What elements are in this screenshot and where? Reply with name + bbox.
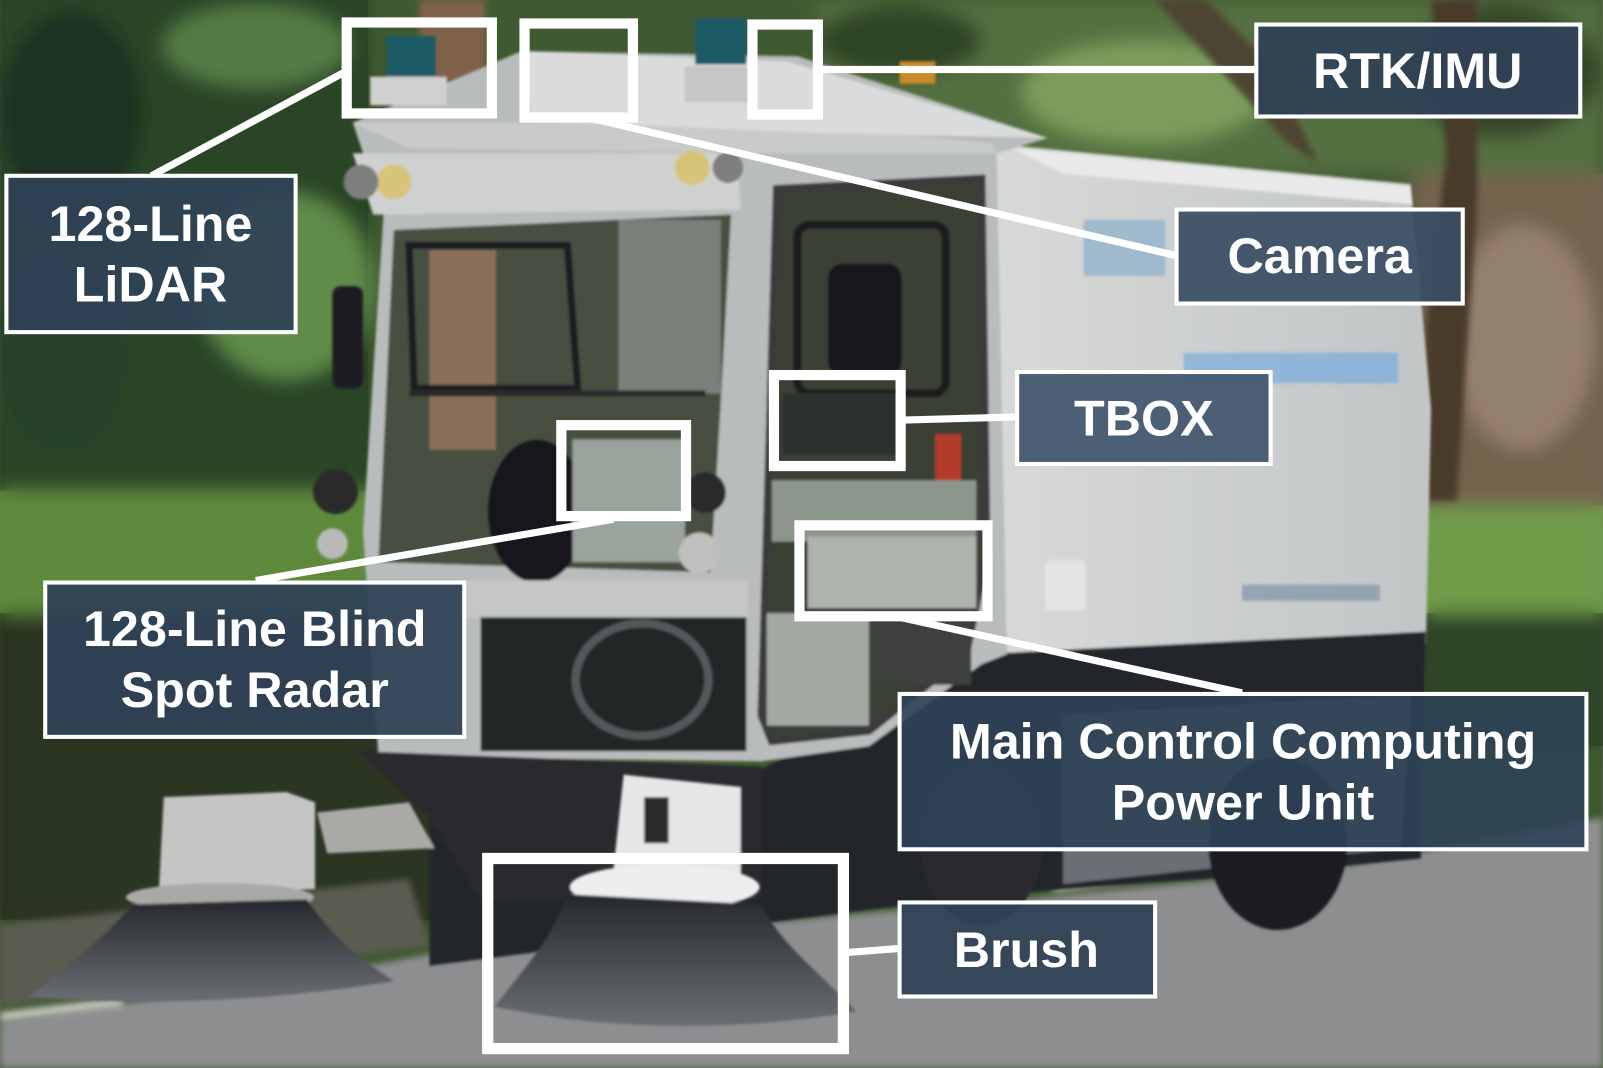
road	[0, 818, 1603, 1068]
box: computing unit	[799, 525, 988, 616]
label: RTK/IMU: RTK/IMU	[1313, 42, 1522, 99]
label: Brush: Brush	[954, 921, 1099, 978]
lower dark chassis	[389, 632, 1426, 966]
label: 128-Line Blind Spot Radar: Spot Radar	[121, 661, 389, 718]
side door window	[762, 179, 986, 741]
label: 128-Line LiDAR	[6, 176, 296, 332]
bumper	[358, 751, 762, 899]
rear box	[986, 143, 1431, 654]
label: TBOX	[1017, 372, 1271, 464]
sensor highlight boxes and leader lines	[152, 22, 1257, 1049]
front windscreen	[378, 215, 731, 572]
box: RTK/IMU	[752, 25, 818, 114]
label: Main Control Computing Power Unit: Power Unit	[1112, 774, 1375, 831]
label: 128-Line Blind Spot Radar	[45, 583, 464, 737]
box: lidar	[347, 22, 492, 113]
label: Main Control Computing Power Unit: Main Control Computing	[950, 712, 1536, 769]
leader lines	[152, 69, 1257, 953]
label: Brush	[900, 902, 1155, 996]
box: brush	[488, 858, 843, 1049]
label: Main Control Computing Power Unit	[900, 694, 1586, 849]
label: 128-Line LiDAR: LiDAR	[74, 255, 227, 312]
blue logo marks	[1084, 220, 1165, 276]
cab frame	[353, 51, 1048, 761]
box: TBOX	[774, 375, 901, 466]
label: Camera	[1177, 210, 1463, 304]
front lower bay	[481, 613, 746, 751]
label: TBOX: TBOX	[1074, 389, 1214, 446]
headlight bar	[353, 153, 741, 215]
tree trunks	[419, 0, 1477, 501]
side brushes	[29, 775, 857, 1026]
lidar units	[387, 36, 436, 79]
rear wheel	[1208, 756, 1347, 930]
sweeper truck	[313, 18, 1431, 966]
label: RTK/IMU	[1256, 25, 1580, 117]
label: 128-Line LiDAR: 128-Line	[49, 195, 252, 252]
box: blind spot radar	[561, 425, 686, 516]
road marking	[0, 867, 1216, 1017]
label: 128-Line Blind Spot Radar: 128-Line Blind	[83, 600, 426, 657]
brush arm	[317, 802, 435, 853]
label: Camera: Camera	[1227, 227, 1413, 284]
curb	[0, 879, 429, 1007]
box: camera	[525, 24, 633, 118]
